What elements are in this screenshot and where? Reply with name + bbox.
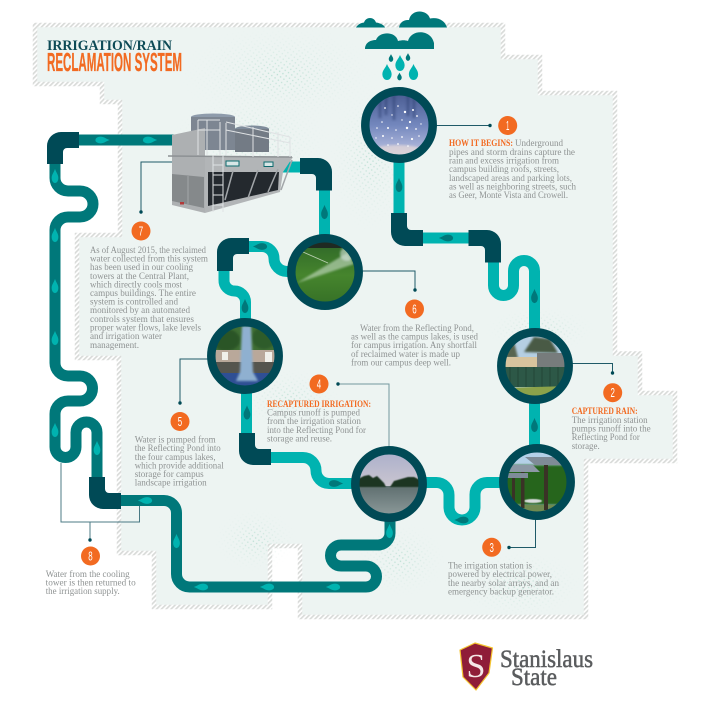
logo: Stanislaus State: State — [511, 664, 557, 691]
text: step 1 how it begins: landscaped areas and parking lots, — [449, 173, 572, 183]
text: step 5: storage for campus — [135, 469, 204, 479]
text: step 1 how it begins: campus building roofs, streets, — [449, 164, 559, 174]
badge 2: 2 — [610, 386, 615, 400]
logo: Stanislaus State: Stanislaus — [500, 646, 593, 673]
circle photo 2: fenced irrigation station — [500, 331, 570, 401]
badge 7: 7 — [139, 224, 143, 238]
text: step 4 recaptured irrigation — [267, 399, 371, 444]
circle photo 4: reflecting pond — [355, 450, 423, 520]
circle photo 6: sprinkler on lawn — [291, 238, 359, 306]
text: step 6: of reclaimed water is made up — [351, 349, 460, 359]
text: step 8: the irrigation supply. — [46, 586, 120, 596]
badge 3 — [482, 538, 501, 557]
badge 6: 6 — [412, 302, 417, 316]
text: step 7: has been used in our cooling — [90, 262, 193, 272]
text: step 7: which directly cools most — [90, 280, 182, 290]
text: step 8: Water from the cooling — [46, 569, 130, 579]
text: step 6: for campus irrigation. Any shortfall — [351, 340, 477, 350]
text: step 8 — [46, 569, 136, 596]
text: step 7: and irrigation water — [90, 331, 162, 341]
badge 3: 3 — [490, 541, 494, 555]
text: step 5: the four campus lakes, — [135, 452, 216, 462]
badge 6 — [405, 300, 424, 318]
text: step 3: The irrigation station is — [448, 560, 532, 570]
text: step 3 — [448, 560, 559, 596]
leader line: step 2 — [572, 364, 612, 373]
water drops on light pipe — [242, 178, 538, 523]
text: step 1 how it begins: Underground — [515, 138, 563, 148]
text: step 4 recaptured irrigation: into the Reflecting Pond for — [267, 425, 366, 435]
text: step 2 captured rain: storage. — [572, 441, 600, 451]
text: step 1 how it begins: as well as neighboring streets, such — [449, 182, 576, 192]
text: step 2 captured rain: CAPTURED RAIN: — [572, 406, 638, 416]
text: step 4 recaptured irrigation: storage and reuse. — [267, 434, 332, 444]
text: step 4 recaptured irrigation: from the irrigation station — [267, 416, 361, 426]
text: step 2 captured rain — [572, 406, 651, 451]
leader line: step 7 — [141, 162, 172, 212]
text: step 7: controls system that ensures — [90, 314, 194, 324]
text: step 7: As of August 2015, the reclaimed — [90, 245, 206, 255]
text: step 3: the nearby solar arrays, and an — [448, 578, 559, 588]
text: step 6: Water from the Reflecting Pond, — [360, 323, 474, 333]
text: step 1 how it begins: rain and excess irrigation from — [449, 156, 559, 166]
text: step 1 how it begins — [449, 138, 576, 200]
icon: rain clouds — [356, 12, 447, 49]
text: step 2 captured rain: pumps runoff into the — [572, 424, 651, 434]
text: step 7: campus buildings. The entire — [90, 288, 196, 298]
text: step 1 how it begins: pipes and storm drains capture the — [449, 147, 575, 157]
text: step 2 captured rain: The irrigation station — [572, 415, 648, 425]
leader line: step 6 — [362, 271, 415, 290]
text: step 6: from our campus deep well. — [351, 358, 451, 368]
text: step 8: tower is then returned to — [46, 578, 136, 588]
circle photo 1: rain — [365, 91, 433, 159]
title: IRRIGATION/RAIN — [47, 38, 172, 54]
text: RECLAMATION SYSTEM — [47, 49, 182, 77]
leader line: step 3 — [509, 519, 536, 548]
text: step 7: water collected from this system — [90, 254, 208, 264]
badge 5 — [170, 412, 190, 431]
text: step 3: powered by electrical power, — [448, 569, 552, 579]
leader line: step 8 — [61, 463, 140, 540]
photo: cooling tower — [168, 114, 293, 213]
badge 8 — [81, 546, 100, 566]
text: step 4 recaptured irrigation: RECAPTURED IRRIGATION: — [267, 399, 371, 409]
text: step 4 recaptured irrigation: Campus runoff is pumped — [267, 408, 360, 418]
text: step 1 how it begins: HOW IT BEGINS: — [449, 138, 513, 148]
water drops on dark pipe — [52, 137, 393, 590]
logo: Stanislaus State: S — [467, 648, 485, 685]
circle photo 5: fountain lake — [211, 322, 279, 391]
badge 1: 1 — [506, 119, 509, 133]
text: step 7: proper water flows, lake levels — [90, 322, 201, 332]
text: step 3: emergency backup generator. — [448, 586, 554, 596]
title — [47, 38, 182, 77]
text: step 5: which provide additional — [135, 460, 224, 470]
badge 4: 4 — [317, 378, 321, 392]
pipe elbows — [47, 132, 501, 509]
text: step 7 — [90, 245, 208, 350]
icon: rain drops — [382, 53, 418, 80]
badge 2 — [603, 383, 622, 402]
badge 1 — [498, 116, 517, 135]
circle photo 3: solar arrays — [503, 448, 571, 516]
text: step 5: Water is pumped from — [135, 434, 216, 444]
text: step 1 how it begins: as Geer, Monte Vista and Crowell. — [449, 190, 568, 200]
leader line: step 4 — [338, 384, 389, 447]
text: step 6 — [351, 323, 478, 368]
badge 8: 8 — [88, 550, 93, 564]
text: step 5: landscape irrigation — [135, 478, 207, 488]
leader line: step 5 — [180, 359, 208, 403]
pipe: light supply line — [224, 160, 534, 520]
badge 7 — [132, 222, 150, 240]
text: step 5: the Reflecting Pond into — [135, 443, 221, 453]
panel: background — [32, 22, 678, 620]
leader line: step 1 — [436, 124, 490, 126]
text: step 7: management. — [90, 340, 139, 350]
text: step 7: monitored by an automated — [90, 305, 190, 315]
text: step 5 — [135, 434, 224, 488]
text: step 7: towers at the Central Plant, — [90, 271, 189, 281]
text: step 2 captured rain: Reflecting Pond for — [572, 432, 640, 442]
badge 4 — [310, 374, 328, 394]
text: step 6: as well as the campus lakes, is used — [351, 332, 478, 342]
badge 5: 5 — [178, 415, 182, 429]
leader dots — [88, 124, 614, 549]
pipe: dark return line — [55, 140, 390, 587]
text: step 7: system is controlled and — [90, 296, 178, 306]
logo: Stanislaus State — [460, 643, 593, 691]
